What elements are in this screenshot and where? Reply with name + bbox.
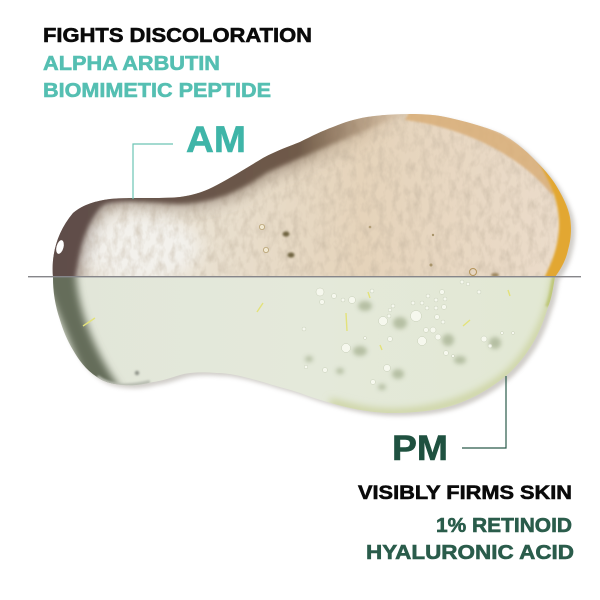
ingredient: alpha arbutin: ALPHA ARBUTIN (43, 52, 220, 75)
ingredient: retinoid: 1% RETINOID (436, 514, 572, 537)
panel: serum swatch (40, 104, 580, 416)
ingredient: biomimetic peptide: BIOMIMETIC PEPTIDE (43, 79, 271, 102)
dark rim (52, 116, 384, 276)
dark left edge (53, 277, 122, 384)
ingredient: hyaluronic acid: HYALURONIC ACID (366, 541, 574, 564)
PM half: green serum (53, 277, 555, 413)
amber rim (405, 110, 560, 195)
bubbles and specks (259, 224, 265, 230)
PM text block (358, 482, 574, 564)
AM label: AM (186, 119, 246, 160)
PM leader line (462, 376, 506, 448)
AM text block (43, 24, 312, 102)
AM leader line (133, 144, 173, 199)
bubbles (302, 280, 514, 384)
divider line (28, 276, 581, 277)
specular highlight (56, 240, 64, 254)
soft drop shadow on right edge (57, 117, 575, 416)
right edge tint (330, 277, 555, 413)
yellow flecks (83, 290, 510, 350)
PM label: PM (392, 429, 448, 468)
heading: fights discoloration: FIGHTS DISCOLORATION (43, 24, 312, 47)
shaded bubble shadows (305, 301, 501, 390)
AM half: amber serum (52, 114, 572, 276)
heading: visibly firms skin: VISIBLY FIRMS SKIN (358, 482, 572, 504)
white glow at left (80, 214, 200, 282)
